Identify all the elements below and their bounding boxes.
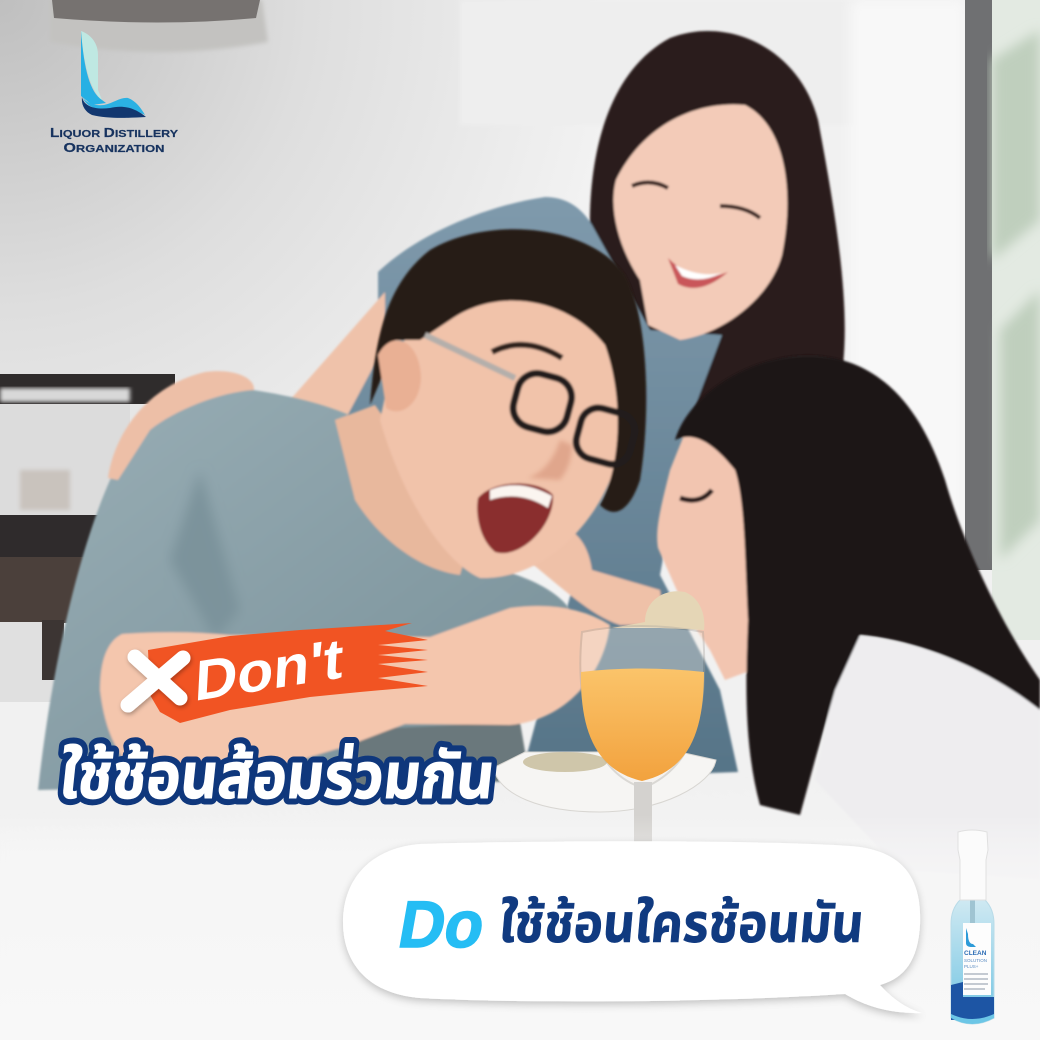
dip tube <box>970 900 975 924</box>
label text: PLUS+ <box>964 964 979 969</box>
photo: table and plate <box>0 752 1040 1040</box>
photo: juice glass <box>580 626 704 842</box>
Do text: Do <box>393 888 490 962</box>
label text: CLEAN <box>964 950 987 957</box>
photo: father <box>38 229 646 790</box>
bottom white fade <box>0 815 1040 1040</box>
logo mark <box>81 31 146 118</box>
father hand on shoulder <box>108 371 254 480</box>
product: clean solution spray bottle <box>951 830 994 1024</box>
father ear <box>378 340 421 411</box>
mother arm <box>290 292 385 420</box>
logo: Liquor Distillery Organization <box>50 31 178 155</box>
daughter white shirt <box>815 635 1040 880</box>
father forearm <box>100 606 610 782</box>
don't headline: ใช้ช้อนส้อมร่วมกัน <box>57 740 498 812</box>
photo: food on spoon <box>612 591 704 630</box>
mother hand <box>525 526 665 625</box>
bottle body <box>951 900 994 1024</box>
don't badge <box>128 623 428 723</box>
daughter hair <box>675 355 1040 815</box>
mother shirt <box>340 197 738 780</box>
shirt shadow below arm <box>340 722 530 790</box>
do message: ใช้ช้อนใครช้อนมัน <box>497 894 866 954</box>
label <box>963 923 991 995</box>
don't headline: ใช้ช้อนส้อมร่วมกัน <box>57 740 498 812</box>
mother hair <box>590 31 845 420</box>
do speech bubble <box>343 841 922 1013</box>
daughter face <box>657 420 770 680</box>
father brow and nose shading <box>492 345 562 358</box>
father shirt <box>38 388 575 790</box>
father glasses <box>425 335 639 468</box>
father neck <box>335 405 470 575</box>
logo text: LIQUOR DISTILLERY <box>50 125 178 140</box>
photo: mother <box>290 31 845 780</box>
nozzle <box>958 830 988 900</box>
label text <box>964 928 988 989</box>
father open mouth <box>477 483 553 553</box>
photo: daughter <box>657 355 1040 880</box>
orange brush stroke <box>148 623 428 723</box>
mother face <box>613 104 787 340</box>
father hair <box>370 229 646 512</box>
Don't text: Don't <box>193 626 345 713</box>
father face <box>380 299 632 578</box>
bubble shape <box>343 841 922 1013</box>
logo: Liquor Distillery Organization: ORGANIZATION <box>64 140 164 155</box>
white cross icon <box>128 657 183 705</box>
label text: SOLUTION <box>964 958 987 963</box>
label blue base <box>951 982 994 1020</box>
